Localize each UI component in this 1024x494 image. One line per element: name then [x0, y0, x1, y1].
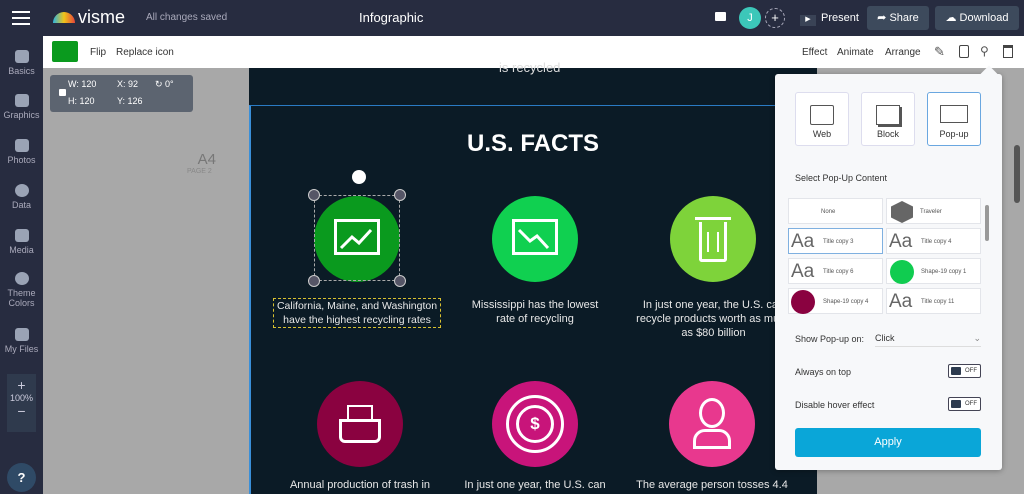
- content grid: Title copy 11: [921, 299, 954, 305]
- fact 1 icon: [314, 196, 400, 282]
- toolbar: Flip: [90, 47, 106, 58]
- popup panel: Select Pop-Up Content: [795, 173, 887, 183]
- left sidebar: Basics: [8, 66, 35, 76]
- download button: [935, 6, 1019, 30]
- popup panel: Click: [875, 333, 894, 343]
- left sidebar: Colors: [8, 298, 34, 308]
- content grid: [788, 198, 981, 314]
- content grid: Title copy 3: [823, 239, 853, 245]
- popup panel: OFF: [965, 368, 977, 374]
- canvas scrollbar: [1014, 145, 1020, 203]
- size info box: [50, 75, 193, 112]
- content grid: None: [821, 209, 835, 215]
- fact 3 icon: [670, 196, 756, 282]
- fact 6 icon: [669, 381, 755, 467]
- toolbar: Arrange: [885, 47, 921, 58]
- left sidebar: Media: [9, 245, 34, 255]
- left sidebar: Data: [12, 200, 31, 210]
- present button: Present: [821, 12, 859, 24]
- color swatch: [52, 41, 78, 62]
- fact 5 icon: $: [530, 414, 540, 433]
- popup panel: OFF: [965, 401, 977, 407]
- popup panel: Pop-up: [939, 129, 969, 139]
- infographic canvas: [249, 68, 817, 494]
- logo: [53, 7, 125, 27]
- content grid: Aa: [889, 231, 912, 252]
- fact 5 icon: [492, 381, 578, 467]
- present button: [800, 12, 859, 26]
- toolbar: [43, 36, 1024, 68]
- left sidebar: [0, 36, 43, 494]
- size info box: Y: 126: [117, 96, 143, 106]
- size info box: X: 92: [117, 79, 138, 89]
- zoom control: +: [17, 377, 26, 393]
- left sidebar: My Files: [5, 344, 38, 354]
- title: U.S. FACTS: [467, 130, 599, 157]
- link type buttons: Web: [813, 129, 831, 139]
- save status: All changes saved: [146, 12, 227, 23]
- fact 6 text: The average person tosses 4.4: [636, 479, 788, 491]
- toolbar: Replace icon: [116, 47, 174, 58]
- toolbar: Animate: [837, 47, 874, 58]
- content grid: Traveler: [920, 209, 942, 215]
- content grid: Title copy 4: [921, 239, 951, 245]
- left sidebar: Graphics: [3, 110, 40, 120]
- toolbar: Effect: [802, 47, 827, 58]
- size info box: W: 120: [68, 79, 96, 89]
- fact 3 text: In just one year, the U.S. can recycle products worth as much as $80 billion: [636, 299, 791, 339]
- toolbar: ⚲: [980, 44, 989, 58]
- zoom control: −: [17, 403, 26, 419]
- fact 2 icon: [492, 196, 578, 282]
- apply button: Apply: [874, 436, 902, 448]
- size info box: ↻ 0°: [155, 79, 174, 89]
- selection box: [314, 195, 400, 281]
- show popup on: Show Pop-up on:: [795, 334, 864, 344]
- text: is recycled: [499, 60, 560, 75]
- content grid: Shape-19 copy 1: [921, 269, 966, 275]
- content grid: Shape-19 copy 4: [823, 299, 868, 305]
- zoom control: [7, 374, 36, 432]
- logo: visme: [78, 7, 125, 27]
- menu icon: [12, 11, 30, 25]
- fact 4 icon: [317, 381, 403, 467]
- zoom control: 100%: [10, 393, 33, 403]
- left sidebar: Theme: [7, 288, 36, 298]
- share button: [867, 6, 929, 30]
- fact 1 text: California, Maine, and Washington have the highest recycling rates: [277, 300, 437, 326]
- content grid: Title copy 6: [823, 269, 853, 275]
- left sidebar: Photos: [7, 155, 36, 165]
- avatar: J: [747, 12, 753, 24]
- help button: [7, 463, 36, 492]
- popup panel: ⌄: [973, 333, 981, 343]
- share button: ➦ Share: [877, 12, 919, 24]
- content grid: Aa: [791, 261, 814, 282]
- fact 4 text: Annual production of trash in: [290, 479, 430, 491]
- top bar: [0, 0, 1024, 36]
- size info box: H: 120: [68, 96, 95, 106]
- popup panel: [775, 74, 1002, 470]
- popup panel: Block: [877, 129, 899, 139]
- content grid: Aa: [791, 231, 814, 252]
- apply button: [795, 428, 981, 457]
- content grid: Aa: [889, 291, 912, 312]
- toolbar: ✎: [934, 44, 945, 59]
- avatar: [739, 7, 761, 29]
- help button: ?: [18, 470, 25, 485]
- present button: ▶: [805, 16, 811, 23]
- always on top: Always on top: [795, 367, 851, 377]
- link type buttons: [795, 92, 849, 146]
- fact 5 text: In just one year, the U.S. can: [464, 479, 606, 491]
- top bar: +: [771, 10, 779, 25]
- fact 2 text: Mississippi has the lowest rate of recycling: [472, 299, 598, 325]
- disable hover: Disable hover effect: [795, 400, 874, 410]
- download button: ☁ Download: [946, 12, 1008, 24]
- document title: Infographic: [359, 10, 423, 25]
- text: PAGE 2: [187, 168, 212, 175]
- page label: A4: [198, 151, 216, 168]
